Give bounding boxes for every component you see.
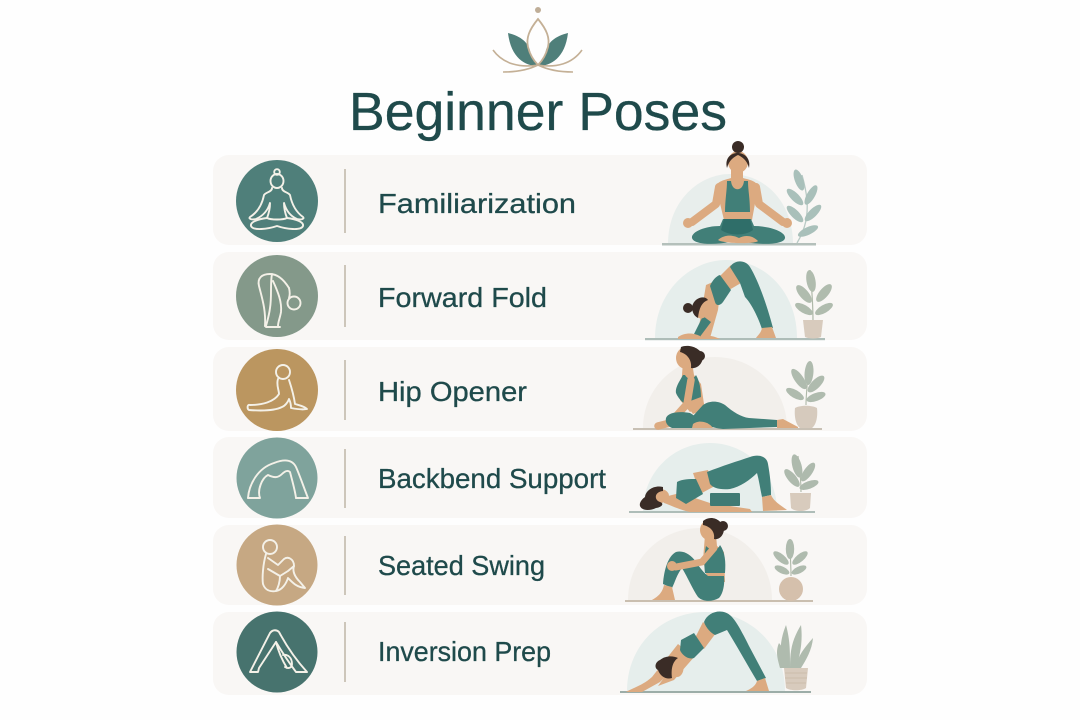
panel: Familiarization bbox=[213, 141, 867, 246]
label: Forward Fold bbox=[378, 282, 547, 313]
plant: striped pot bbox=[777, 625, 813, 690]
figure: easy seat bbox=[662, 141, 816, 246]
label: Inversion Prep bbox=[378, 636, 551, 667]
panel: Forward Fold bbox=[213, 252, 867, 340]
panel: Inversion Prep bbox=[213, 611, 867, 695]
label: Familiarization bbox=[378, 188, 576, 219]
icon: cobra pose bbox=[236, 349, 318, 431]
icon: seated meditation bbox=[236, 160, 318, 242]
figure: supported bridge bbox=[629, 443, 815, 513]
plant: potted leaves bbox=[784, 361, 827, 428]
icon: forward fold bbox=[236, 255, 318, 337]
divider bbox=[344, 265, 346, 327]
panel: Hip Opener bbox=[213, 346, 867, 431]
plant: round pot bbox=[771, 539, 810, 601]
plant: potted leaves bbox=[793, 269, 835, 338]
title: Beginner Poses bbox=[349, 82, 727, 142]
label: Seated Swing bbox=[378, 550, 545, 581]
figure: seated knees to chest bbox=[625, 518, 813, 602]
panel: Seated Swing bbox=[213, 518, 867, 606]
icon: seated hug knees bbox=[236, 524, 318, 606]
plant: fern bbox=[784, 168, 824, 243]
divider bbox=[344, 169, 346, 233]
icon: lotus logo bbox=[493, 7, 582, 72]
divider bbox=[344, 360, 346, 420]
figure: hip opener pose bbox=[633, 346, 822, 430]
icon: downward dog bbox=[236, 612, 318, 692]
label: Hip Opener bbox=[378, 376, 527, 407]
divider bbox=[344, 449, 346, 508]
figure: downward dog pose bbox=[620, 611, 811, 693]
icon: bridge arch bbox=[236, 438, 318, 518]
label: Backbend Support bbox=[378, 463, 606, 494]
figure: forward fold pose bbox=[645, 260, 825, 340]
plant: potted leaves bbox=[782, 453, 820, 511]
divider bbox=[344, 536, 346, 595]
panel: Backbend Support bbox=[213, 437, 867, 518]
divider bbox=[344, 622, 346, 682]
